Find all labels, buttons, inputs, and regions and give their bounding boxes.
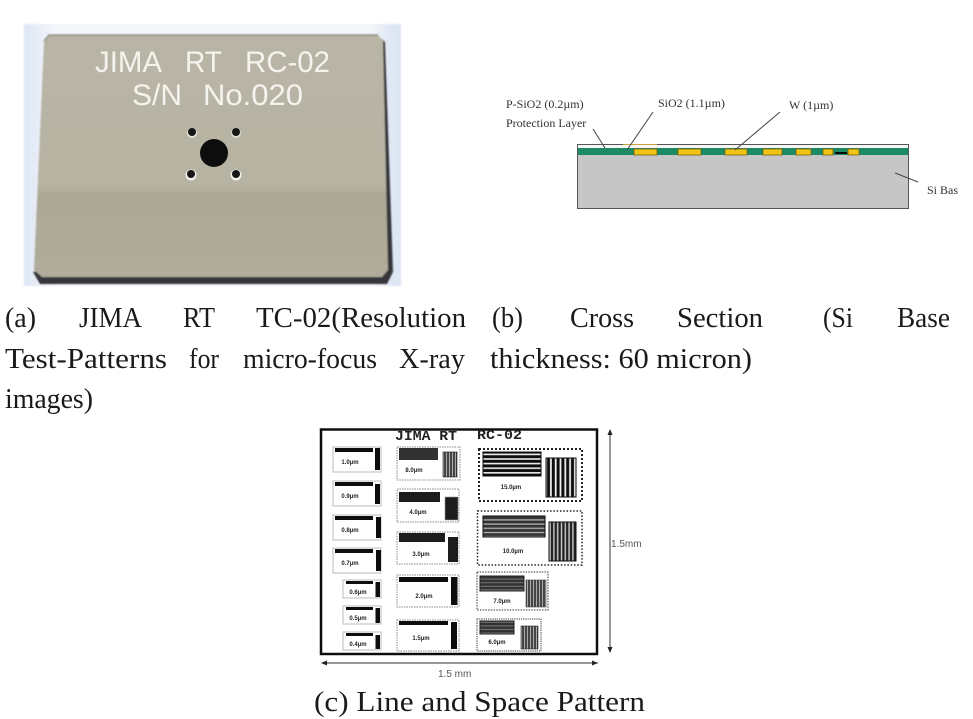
caption (b): (Si xyxy=(823,302,853,334)
label: Si base xyxy=(895,173,958,197)
chip engraved label: S/N xyxy=(132,79,182,112)
pattern 3.0um: 3.0µm xyxy=(412,552,430,558)
pattern 1.5um: 1.5µm xyxy=(412,636,430,642)
pattern 0.5um xyxy=(343,606,381,624)
chip engraved label: RT xyxy=(185,46,222,79)
caption (a): X-ray xyxy=(399,343,465,375)
pattern 6.0um xyxy=(477,619,541,651)
chip plate xyxy=(33,35,393,284)
pattern 0.7um xyxy=(333,548,381,573)
arrow: vertical dimension: 1.5mm xyxy=(611,539,642,550)
label: P-SiO2 protection layer xyxy=(506,97,605,148)
caption (a): for xyxy=(189,343,219,375)
SiO2 green layer xyxy=(578,148,908,155)
pattern 0.9um: 0.9µm xyxy=(341,494,359,500)
caption (a): micro-focus xyxy=(243,343,377,375)
label: SiO2 xyxy=(627,96,725,150)
pattern 0.8um: 0.8µm xyxy=(341,528,359,534)
label: P-SiO2 protection layer: Protection Layer xyxy=(506,116,586,130)
caption (b): Cross xyxy=(570,302,634,334)
pattern 1.0um xyxy=(333,447,381,472)
label: W: W (1µm) xyxy=(789,98,833,112)
chip engraved label: RC-02 xyxy=(245,46,330,79)
pattern 4.0um xyxy=(397,489,459,522)
label: P-SiO2 protection layer: P-SiO2 (0.2µm) xyxy=(506,97,584,111)
diagram title: JIMA RT xyxy=(395,429,457,445)
pattern 0.4um xyxy=(343,632,381,650)
panel: cross section diagram xyxy=(506,96,958,208)
defect marks xyxy=(623,144,847,154)
chip engraved label: JIMA xyxy=(95,46,162,79)
pattern 0.4um: 0.4µm xyxy=(349,642,367,648)
pattern 7.0um: 7.0µm xyxy=(493,599,511,605)
label: SiO2: SiO2 (1.1µm) xyxy=(658,96,725,110)
pattern 0.5um: 0.5µm xyxy=(349,616,367,622)
pattern 0.9um xyxy=(333,481,381,506)
pattern 3.0um xyxy=(397,532,459,564)
pattern 10.0um: 10.0µm xyxy=(503,549,523,555)
caption (a): RT xyxy=(183,302,215,334)
small patterns column xyxy=(333,447,381,650)
caption (a) xyxy=(5,302,466,415)
pattern 7.0um xyxy=(477,572,548,610)
medium patterns column xyxy=(397,447,460,651)
caption (b): thickness: 60 micron) xyxy=(490,343,752,375)
photo background xyxy=(24,24,401,286)
arrow: horizontal dimension xyxy=(321,660,598,680)
pattern 4.0um: 4.0µm xyxy=(409,510,427,516)
pattern 2.0um xyxy=(397,575,459,607)
caption (b): Base xyxy=(897,302,950,334)
pattern 15.0um xyxy=(479,449,582,501)
arrow: vertical dimension xyxy=(608,429,642,653)
panel: line and space pattern diagram xyxy=(321,428,597,654)
pattern 0.6um: 0.6µm xyxy=(349,590,367,596)
pattern 0.8um xyxy=(333,515,381,540)
tungsten pattern blocks xyxy=(634,149,859,155)
pattern 8.0um xyxy=(397,447,460,480)
diagram title xyxy=(395,428,522,445)
caption (b) xyxy=(490,302,950,375)
pattern 10.0um xyxy=(478,511,582,565)
pattern 6.0um: 6.0µm xyxy=(488,640,506,646)
silicon base layer xyxy=(578,144,908,208)
pattern 15.0um: 15.0µm xyxy=(501,485,521,491)
pattern 2.0um: 2.0µm xyxy=(415,594,433,600)
diagram title: RC-02 xyxy=(477,428,522,444)
chip engraved label xyxy=(95,46,330,112)
arrow: horizontal dimension: 1.5 mm xyxy=(438,669,471,680)
caption (b): Section xyxy=(677,302,763,334)
chip holes xyxy=(186,128,242,180)
outer chip frame xyxy=(321,430,597,654)
large patterns column xyxy=(477,449,582,651)
chip engraved label: No.020 xyxy=(203,79,303,112)
caption (a): TC-02(Resolution xyxy=(256,302,466,334)
pattern 1.0um: 1.0µm xyxy=(341,460,359,466)
caption (a): (a) xyxy=(5,302,36,334)
label: W xyxy=(735,98,833,150)
label: Si base: Si Bas xyxy=(927,183,958,197)
pattern 0.7um: 0.7µm xyxy=(341,561,359,567)
caption (c): (c) Line and Space Pattern xyxy=(314,686,646,718)
caption (a): Test-Patterns xyxy=(5,343,167,375)
panel: photo of JIMA RT RC-02 test chip xyxy=(24,24,401,286)
caption (a): images) xyxy=(5,383,93,415)
pattern 0.6um xyxy=(343,580,381,598)
protection layer xyxy=(578,145,908,148)
pattern 1.5um xyxy=(397,620,459,651)
caption (a): JIMA xyxy=(79,302,142,334)
pattern 8.0um: 8.0µm xyxy=(405,468,423,474)
caption (b): (b) xyxy=(492,302,523,334)
